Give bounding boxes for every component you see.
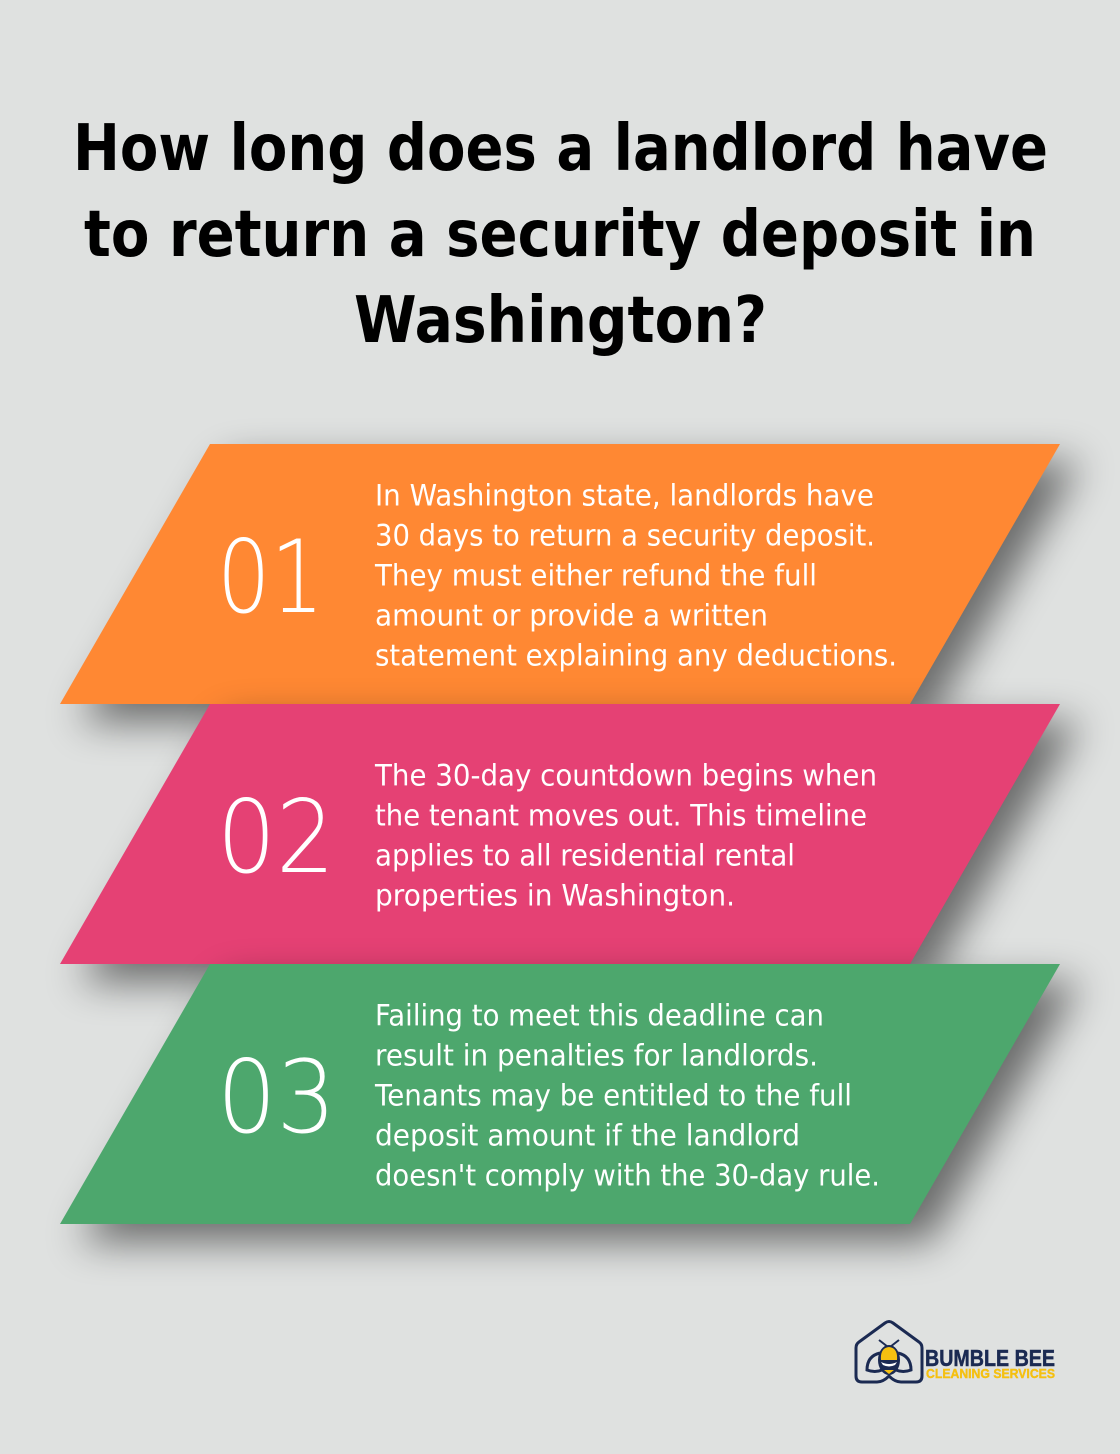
text: step 03 description: Tenants may be entitled to the full: [374, 1078, 852, 1112]
text: step 01 description: 30 days to return a security deposit.: [375, 518, 875, 552]
text: step 02 description: applies to all residential rental: [375, 838, 795, 872]
text: step 02 description: the tenant moves out. This timeline: [375, 798, 867, 832]
number 03: 03: [217, 1038, 336, 1156]
text: step 01 description: [374, 478, 897, 672]
text: step 03 description: [374, 998, 880, 1192]
panel: step 02: [60, 704, 1080, 982]
logo tagline: CLEANING SERVICES: [926, 1366, 1055, 1381]
title: Washington?: [354, 284, 767, 358]
text: step 01 description: statement explaining any deductions.: [375, 638, 897, 672]
text: step 02 description: The 30-day countdown begins when: [374, 758, 877, 792]
text: step 03 description: deposit amount if the landlord: [375, 1118, 800, 1152]
text: step 03 description: result in penalties for landlords.: [375, 1038, 818, 1072]
text: step 01 description: amount or provide a written: [375, 598, 768, 632]
number 01: 01: [217, 518, 324, 636]
text: step 02 description: [374, 758, 877, 912]
text: step 02 description: properties in Washington.: [375, 878, 735, 912]
icon: house outline: [856, 1322, 922, 1382]
number 02: 02: [217, 778, 335, 896]
text: step 01 description: They must either refund the full: [374, 558, 817, 592]
text: step 03 description: doesn't comply with the 30-day rule.: [375, 1158, 880, 1192]
logo wordmark: BUMBLE BEE: [925, 1345, 1055, 1371]
logo: Bumble Bee Cleaning Services: [856, 1322, 1055, 1382]
panel: step 03: [60, 964, 1080, 1242]
icon: bee: [867, 1340, 911, 1375]
panel: step 01: [60, 444, 1080, 722]
text: step 01 description: In Washington state, landlords have: [375, 478, 874, 512]
title: [73, 112, 1048, 358]
text: step 03 description: Failing to meet this deadline can: [375, 998, 824, 1032]
